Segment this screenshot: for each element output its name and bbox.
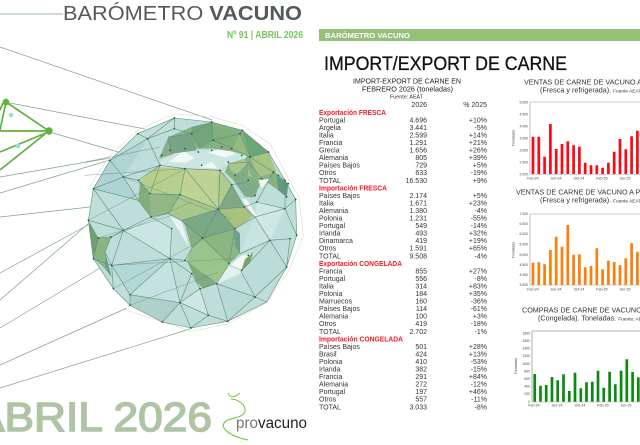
table: exportación congelada: TOTAL: [319, 329, 341, 336]
table: importación congelada: -53%: [471, 359, 487, 366]
bar chart: ventas fresca red: 5.000: [520, 100, 528, 104]
table: exportación congelada: 100: [415, 314, 427, 321]
bar chart: ventas fresca orange: Toneladas: [512, 242, 516, 258]
table: importación fresca: 1.671: [409, 200, 427, 207]
table heading: IMPORT-EXPORT DE CARNE EN: [353, 78, 461, 86]
table: exportación congelada: Otros: [319, 321, 337, 328]
table: exportación fresca: 1.291: [409, 140, 427, 147]
table: exportación congelada: 2.702: [409, 329, 427, 336]
bar chart: compras congelada green: [514, 306, 640, 408]
table: exportación congelada: Francia: [319, 268, 342, 275]
sea: Atlantic and Indian Ocean highlights: [170, 179, 270, 284]
table: exportación fresca: +14%: [469, 132, 487, 140]
table: exportación fresca: Grecia: [319, 148, 340, 155]
table: exportación fresca: +5%: [473, 163, 487, 170]
globe: low-poly earth: [85, 114, 303, 331]
bar chart: ventas fresca red: Jun-25: [620, 176, 630, 180]
table: exportación fresca: 729: [415, 163, 427, 170]
bar chart: compras congelada green: 0: [528, 400, 530, 404]
bar chart: ventas fresca orange: 5.500: [520, 242, 528, 246]
table: importación congelada: Irlanda: [319, 366, 341, 374]
table: exportación fresca: Argelia: [319, 125, 341, 132]
table: exportación fresca: Alemania: [319, 155, 348, 162]
bar chart: ventas fresca red: Toneladas: [512, 130, 516, 146]
table: exportación congelada: Polonia: [319, 291, 342, 298]
table: importación fresca: +23%: [469, 200, 487, 207]
bar chart: compras congelada green: 1800: [522, 332, 530, 336]
table: importación fresca: 1.231: [409, 216, 427, 222]
issue label: Nº 91 | ABRIL 2026: [227, 29, 303, 41]
bar chart: compras congelada green: Toneladas: [514, 358, 518, 374]
table heading: [353, 78, 487, 109]
table: exportación congelada: Marruecos: [319, 299, 353, 306]
table heading: Fuente: AEAT: [390, 95, 423, 101]
page heading: IMPORT/EXPORT DE CARNE: [324, 53, 567, 75]
section bar: [319, 29, 640, 41]
table: importación congelada: +28%: [469, 344, 487, 351]
sea: Mediterranean gaps: [157, 147, 248, 169]
table: importación fresca: TOTAL: [319, 253, 341, 260]
table: importación congelada: TOTAL: [319, 404, 341, 411]
table: importación fresca: Importación FRESCA: [319, 185, 387, 192]
table: exportación fresca: -5%: [475, 125, 487, 132]
mesh vertices: [88, 118, 297, 328]
bar chart: ventas fresca red: Feb-24: [527, 176, 539, 180]
bar chart: ventas fresca orange: Feb-25: [596, 288, 608, 292]
bar chart: compras congelada green: 800: [524, 370, 530, 374]
bar chart: compras congelada green: Jun-24: [552, 404, 562, 408]
bar chart: ventas fresca orange: Jun-24: [550, 288, 562, 292]
table heading: FEBRERO 2026 (toneladas): [362, 86, 453, 94]
land: Africa: [138, 167, 253, 289]
bar chart: ventas fresca orange: [512, 188, 640, 292]
table: importación congelada: 3.033: [409, 404, 427, 411]
bar chart: ventas fresca red: Oct-24: [574, 176, 584, 180]
table: importación congelada: -11%: [471, 397, 487, 404]
table: exportación fresca: [319, 110, 487, 185]
bar chart: ventas fresca orange: 4.500: [520, 263, 528, 267]
table: exportación congelada: [319, 261, 487, 336]
bar chart: ventas fresca orange: 6.000: [520, 232, 528, 236]
table: importación congelada: 410: [415, 359, 427, 366]
bar chart: ventas fresca red: 3.500: [520, 136, 528, 140]
table: importación congelada: 424: [415, 351, 427, 358]
table: exportación fresca: Italia: [319, 132, 334, 140]
table: importación fresca: Países Bajos: [319, 193, 360, 200]
masthead title: BARÓMETRO VACUNO: [63, 2, 302, 25]
table: importación congelada: -8%: [475, 404, 487, 411]
table: importación congelada: 272: [415, 382, 427, 389]
table: importación fresca: 2.174: [409, 193, 427, 200]
bar chart: compras congelada green: 600: [524, 377, 530, 381]
bar chart: ventas fresca red: 4.000: [520, 124, 528, 128]
table: exportación congelada: +27%: [469, 268, 487, 275]
bar chart: ventas fresca orange: Oct-24: [574, 288, 584, 292]
table: exportación congelada: 556: [415, 276, 427, 283]
table: exportación congelada: 419: [415, 321, 427, 328]
table: exportación fresca: 1.656: [409, 148, 427, 155]
table: exportación fresca: -19%: [471, 170, 487, 177]
table: exportación fresca: +9%: [473, 178, 487, 185]
table: exportación congelada: Alemania: [319, 314, 348, 321]
table: importación fresca: -55%: [471, 216, 487, 222]
bar chart: ventas fresca orange: (Fresca y refrigerada). Fuente AEAT: [540, 196, 640, 204]
table: exportación congelada: 160: [415, 299, 427, 306]
table: importación congelada: Portugal: [319, 389, 346, 396]
table: importación fresca: Portugal: [319, 223, 346, 230]
table: importación fresca: +5%: [473, 193, 487, 200]
table: exportación congelada: 114: [416, 306, 427, 313]
table: importación congelada: +46%: [469, 389, 487, 396]
land: South America edge: [88, 220, 112, 277]
table: importación fresca: -4%: [475, 253, 487, 260]
table: importación fresca: 493: [415, 231, 427, 238]
bar chart: ventas fresca orange: 7.000: [520, 212, 528, 216]
table: exportación congelada: -18%: [471, 321, 487, 328]
table: importación fresca: +65%: [469, 246, 487, 253]
bar chart: compras congelada green: 1400: [522, 346, 530, 350]
bar chart: compras congelada green: Oct-24: [575, 404, 585, 408]
table: importación congelada: Importación CONGELADA: [319, 336, 403, 343]
table: exportación fresca: Países Bajos: [319, 163, 360, 170]
bar chart: compras congelada green: 1600: [522, 339, 530, 343]
bar chart: ventas fresca red: VENTAS DE CARNE DE VACUNO A: [524, 78, 640, 86]
table: exportación congelada: Países Bajos: [319, 306, 360, 313]
bar chart: compras congelada green: 400: [524, 384, 530, 388]
table: exportación congelada: +3%: [473, 314, 487, 321]
table: exportación fresca: 805: [415, 155, 427, 162]
bar chart: ventas fresca red: (Fresca y refrigerada). Fuente AEAT: [540, 86, 640, 94]
bar chart: compras congelada green: Feb-24: [528, 404, 540, 408]
bar chart: compras congelada green: 1000: [522, 362, 530, 366]
logo: provacuno: provacuno: [236, 415, 307, 432]
table: importación congelada: +13%: [469, 351, 487, 358]
table: importación fresca: 1.380: [409, 208, 427, 215]
table: importación congelada: [319, 336, 487, 411]
table: exportación congelada: -8%: [475, 276, 487, 283]
bar chart: ventas fresca orange: 4.000: [520, 273, 528, 277]
table: importación congelada: -12%: [471, 382, 487, 389]
table: exportación congelada: 184: [415, 291, 427, 298]
logo: provacuno: [223, 393, 307, 440]
table: exportación congelada: -61%: [471, 306, 487, 313]
table: importación congelada: Alemania: [319, 382, 348, 389]
bar chart: compras congelada green: Jun-25: [620, 404, 632, 408]
table: importación congelada: +84%: [469, 374, 487, 381]
bar chart: ventas fresca red: 3.000: [520, 148, 528, 152]
table: importación fresca: Polonia: [319, 216, 342, 222]
table: exportación fresca: +21%: [469, 140, 487, 147]
bar chart: ventas fresca red: 2.000: [520, 172, 528, 176]
table: importación fresca: 1.591: [409, 246, 427, 253]
bar chart: ventas fresca red: [512, 78, 640, 180]
section bar: BARÓMETRO VACUNO: [325, 31, 411, 40]
mesh lines: [85, 118, 297, 328]
table heading: 2026: [411, 102, 427, 109]
table: exportación congelada: Portugal: [319, 276, 346, 283]
table: importación fresca: -4%: [475, 208, 487, 215]
table: exportación congelada: 314: [415, 284, 427, 290]
bar chart: ventas fresca red: 4.500: [520, 112, 528, 116]
table: importación fresca: 9.508: [409, 253, 427, 260]
table: exportación fresca: 16.530: [406, 178, 427, 185]
table: exportación fresca: Francia: [319, 140, 342, 147]
table heading: % 2025: [463, 102, 487, 109]
table: exportación congelada: -36%: [471, 299, 487, 306]
table: importación congelada: Otros: [319, 397, 337, 404]
bar chart: ventas fresca red: 2.500: [520, 160, 528, 164]
table: importación fresca: [319, 185, 487, 260]
land: Europe and Asia: [159, 122, 288, 198]
bar chart: ventas fresca red: Feb-25: [596, 176, 608, 180]
table: importación fresca: Italia: [319, 200, 334, 207]
bar chart: compras congelada green: 200: [524, 392, 530, 396]
bar chart: ventas fresca orange: 3.500: [520, 283, 528, 287]
table: exportación fresca: +39%: [469, 155, 487, 162]
table: importación congelada: -15%: [471, 366, 487, 374]
table: exportación congelada: Exportación CONGELADA: [319, 261, 402, 268]
table: importación fresca: -14%: [471, 223, 487, 230]
table: importación fresca: Alemania: [319, 208, 348, 215]
bar chart: ventas fresca orange: Feb-24: [527, 288, 539, 292]
table: importación congelada: Países Bajos: [319, 344, 360, 351]
bar chart: compras congelada green: 1200: [522, 354, 530, 358]
table: importación fresca: Otros: [319, 246, 337, 253]
table: exportación congelada: +83%: [469, 284, 487, 290]
table: exportación congelada: Italia: [319, 284, 334, 290]
table: importación congelada: Polonia: [319, 359, 342, 366]
table: importación fresca: 549: [415, 223, 427, 230]
table: exportación fresca: +10%: [469, 117, 487, 124]
bar chart: ventas fresca red: Jun-24: [550, 176, 562, 180]
bar chart: ventas fresca orange: 5.000: [520, 253, 528, 257]
table: importación fresca: +19%: [469, 238, 487, 245]
table: exportación fresca: Otros: [319, 170, 337, 177]
table: exportación congelada: +35%: [469, 291, 487, 298]
table: exportación fresca: Portugal: [319, 117, 346, 124]
land: Madagascar: [241, 252, 253, 271]
table: exportación fresca: 3.441: [409, 125, 427, 132]
table: importación congelada: 501: [415, 344, 427, 351]
table: exportación fresca: 633: [415, 170, 427, 177]
bar chart: compras congelada green: Feb-25: [597, 404, 609, 408]
table: importación fresca: 419: [415, 238, 427, 245]
table: importación congelada: 557: [415, 397, 427, 404]
table: importación fresca: Irlanda: [319, 231, 341, 238]
table: importación congelada: 197: [415, 389, 427, 396]
table: exportación fresca: TOTAL: [319, 178, 341, 185]
table: importación fresca: +32%: [469, 231, 487, 238]
table: exportación congelada: 855: [415, 268, 427, 275]
bar chart: ventas fresca orange: 6.500: [520, 222, 528, 226]
connecting lines from network to globe: [0, 14, 212, 388]
table: importación congelada: Francia: [319, 374, 342, 381]
table: importación fresca: Dinamarca: [319, 238, 353, 245]
icon: green network nodes: [0, 99, 53, 170]
bar chart: ventas fresca orange: Jun-25: [620, 288, 630, 292]
table: importación congelada: Brasil: [319, 351, 337, 358]
table: importación congelada: 291: [415, 374, 427, 381]
table: exportación fresca: +26%: [469, 148, 487, 155]
table: importación congelada: 382: [415, 366, 427, 374]
table: exportación congelada: -1%: [475, 329, 487, 336]
table: exportación fresca: 4.696: [409, 117, 427, 124]
table: exportación fresca: 2.599: [409, 132, 427, 140]
table: exportación fresca: Exportación FRESCA: [319, 110, 386, 117]
